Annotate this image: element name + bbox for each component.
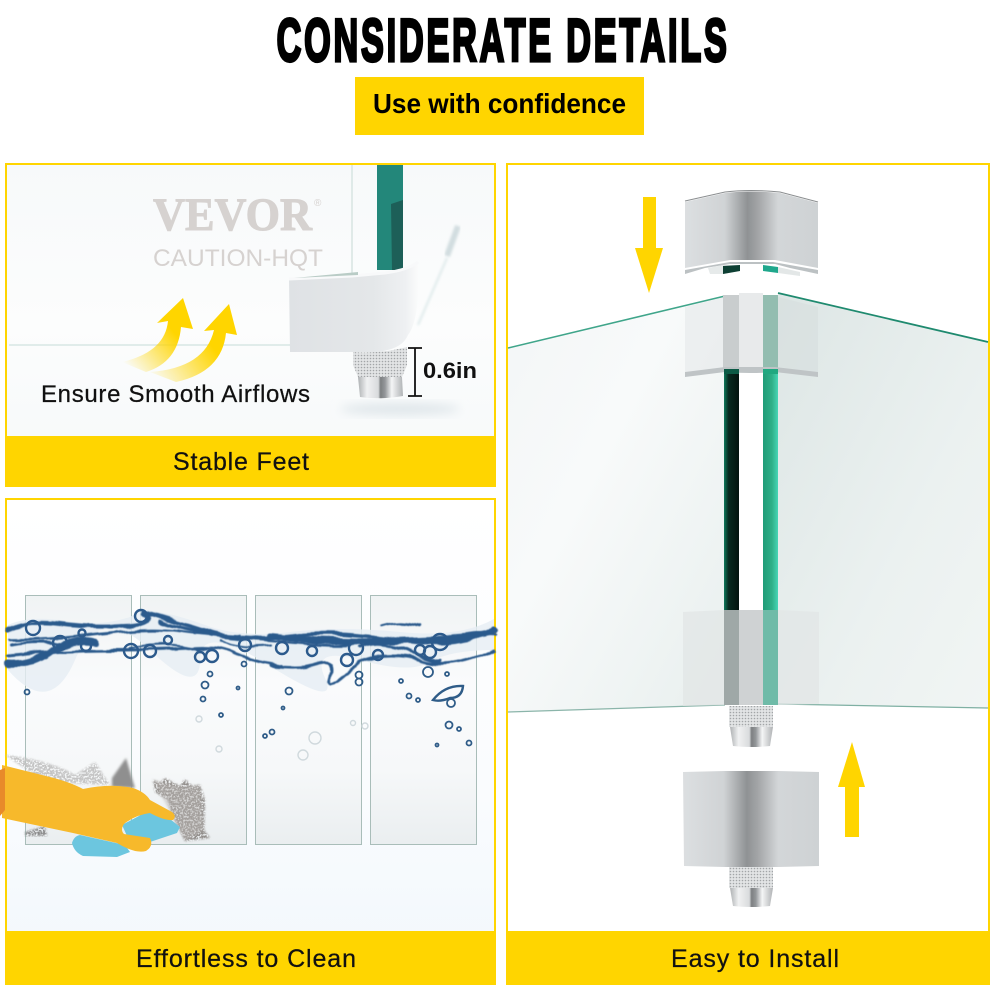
caption bar: Stable Feet	[173, 448, 309, 476]
caption bar	[506, 931, 990, 985]
watermark logo	[153, 189, 323, 272]
caption bar: Easy to Install	[671, 945, 839, 973]
arrow: down	[635, 197, 663, 293]
panel: stable feet	[5, 164, 496, 487]
airflow arrows	[122, 298, 237, 382]
loose foot	[729, 867, 773, 907]
background shelf lines	[9, 184, 460, 415]
water wave	[8, 610, 494, 692]
title: CONSIDERATE DETAILS	[277, 8, 727, 75]
panel: easy to install	[506, 164, 990, 985]
arrow: up	[838, 742, 865, 837]
watermark logo: CAUTION-HQT	[153, 245, 323, 272]
subtitle banner: Use with confidence	[373, 88, 626, 119]
caption bar	[5, 931, 496, 985]
bubbles	[24, 662, 472, 746]
watermark logo: ®	[314, 198, 322, 209]
dirt marks	[5, 755, 210, 841]
airflow text: Ensure Smooth Airflows	[41, 381, 310, 408]
panel: effortless to clean	[0, 499, 496, 985]
caption bar	[5, 436, 496, 487]
caption bar: Effortless to Clean	[136, 945, 356, 973]
height dimension: 0.6in	[423, 358, 477, 383]
adjustable foot	[353, 347, 407, 398]
lower fitted bracket	[683, 610, 819, 706]
loose top cap	[685, 190, 818, 276]
height dimension	[408, 348, 477, 396]
loose bottom bracket	[683, 771, 819, 867]
corner glass edges	[724, 370, 778, 615]
watermark logo: VEVOR	[153, 189, 313, 241]
cleaning cloth	[72, 810, 180, 857]
yellow glove	[0, 765, 175, 852]
fitted foot	[729, 706, 773, 747]
glass edge	[352, 165, 403, 275]
glass left pane	[508, 296, 725, 712]
foot bracket	[289, 262, 418, 352]
upper fitted bracket	[685, 293, 818, 377]
glass right pane	[778, 293, 988, 708]
subtitle banner	[355, 77, 644, 135]
glass panes	[26, 596, 476, 844]
